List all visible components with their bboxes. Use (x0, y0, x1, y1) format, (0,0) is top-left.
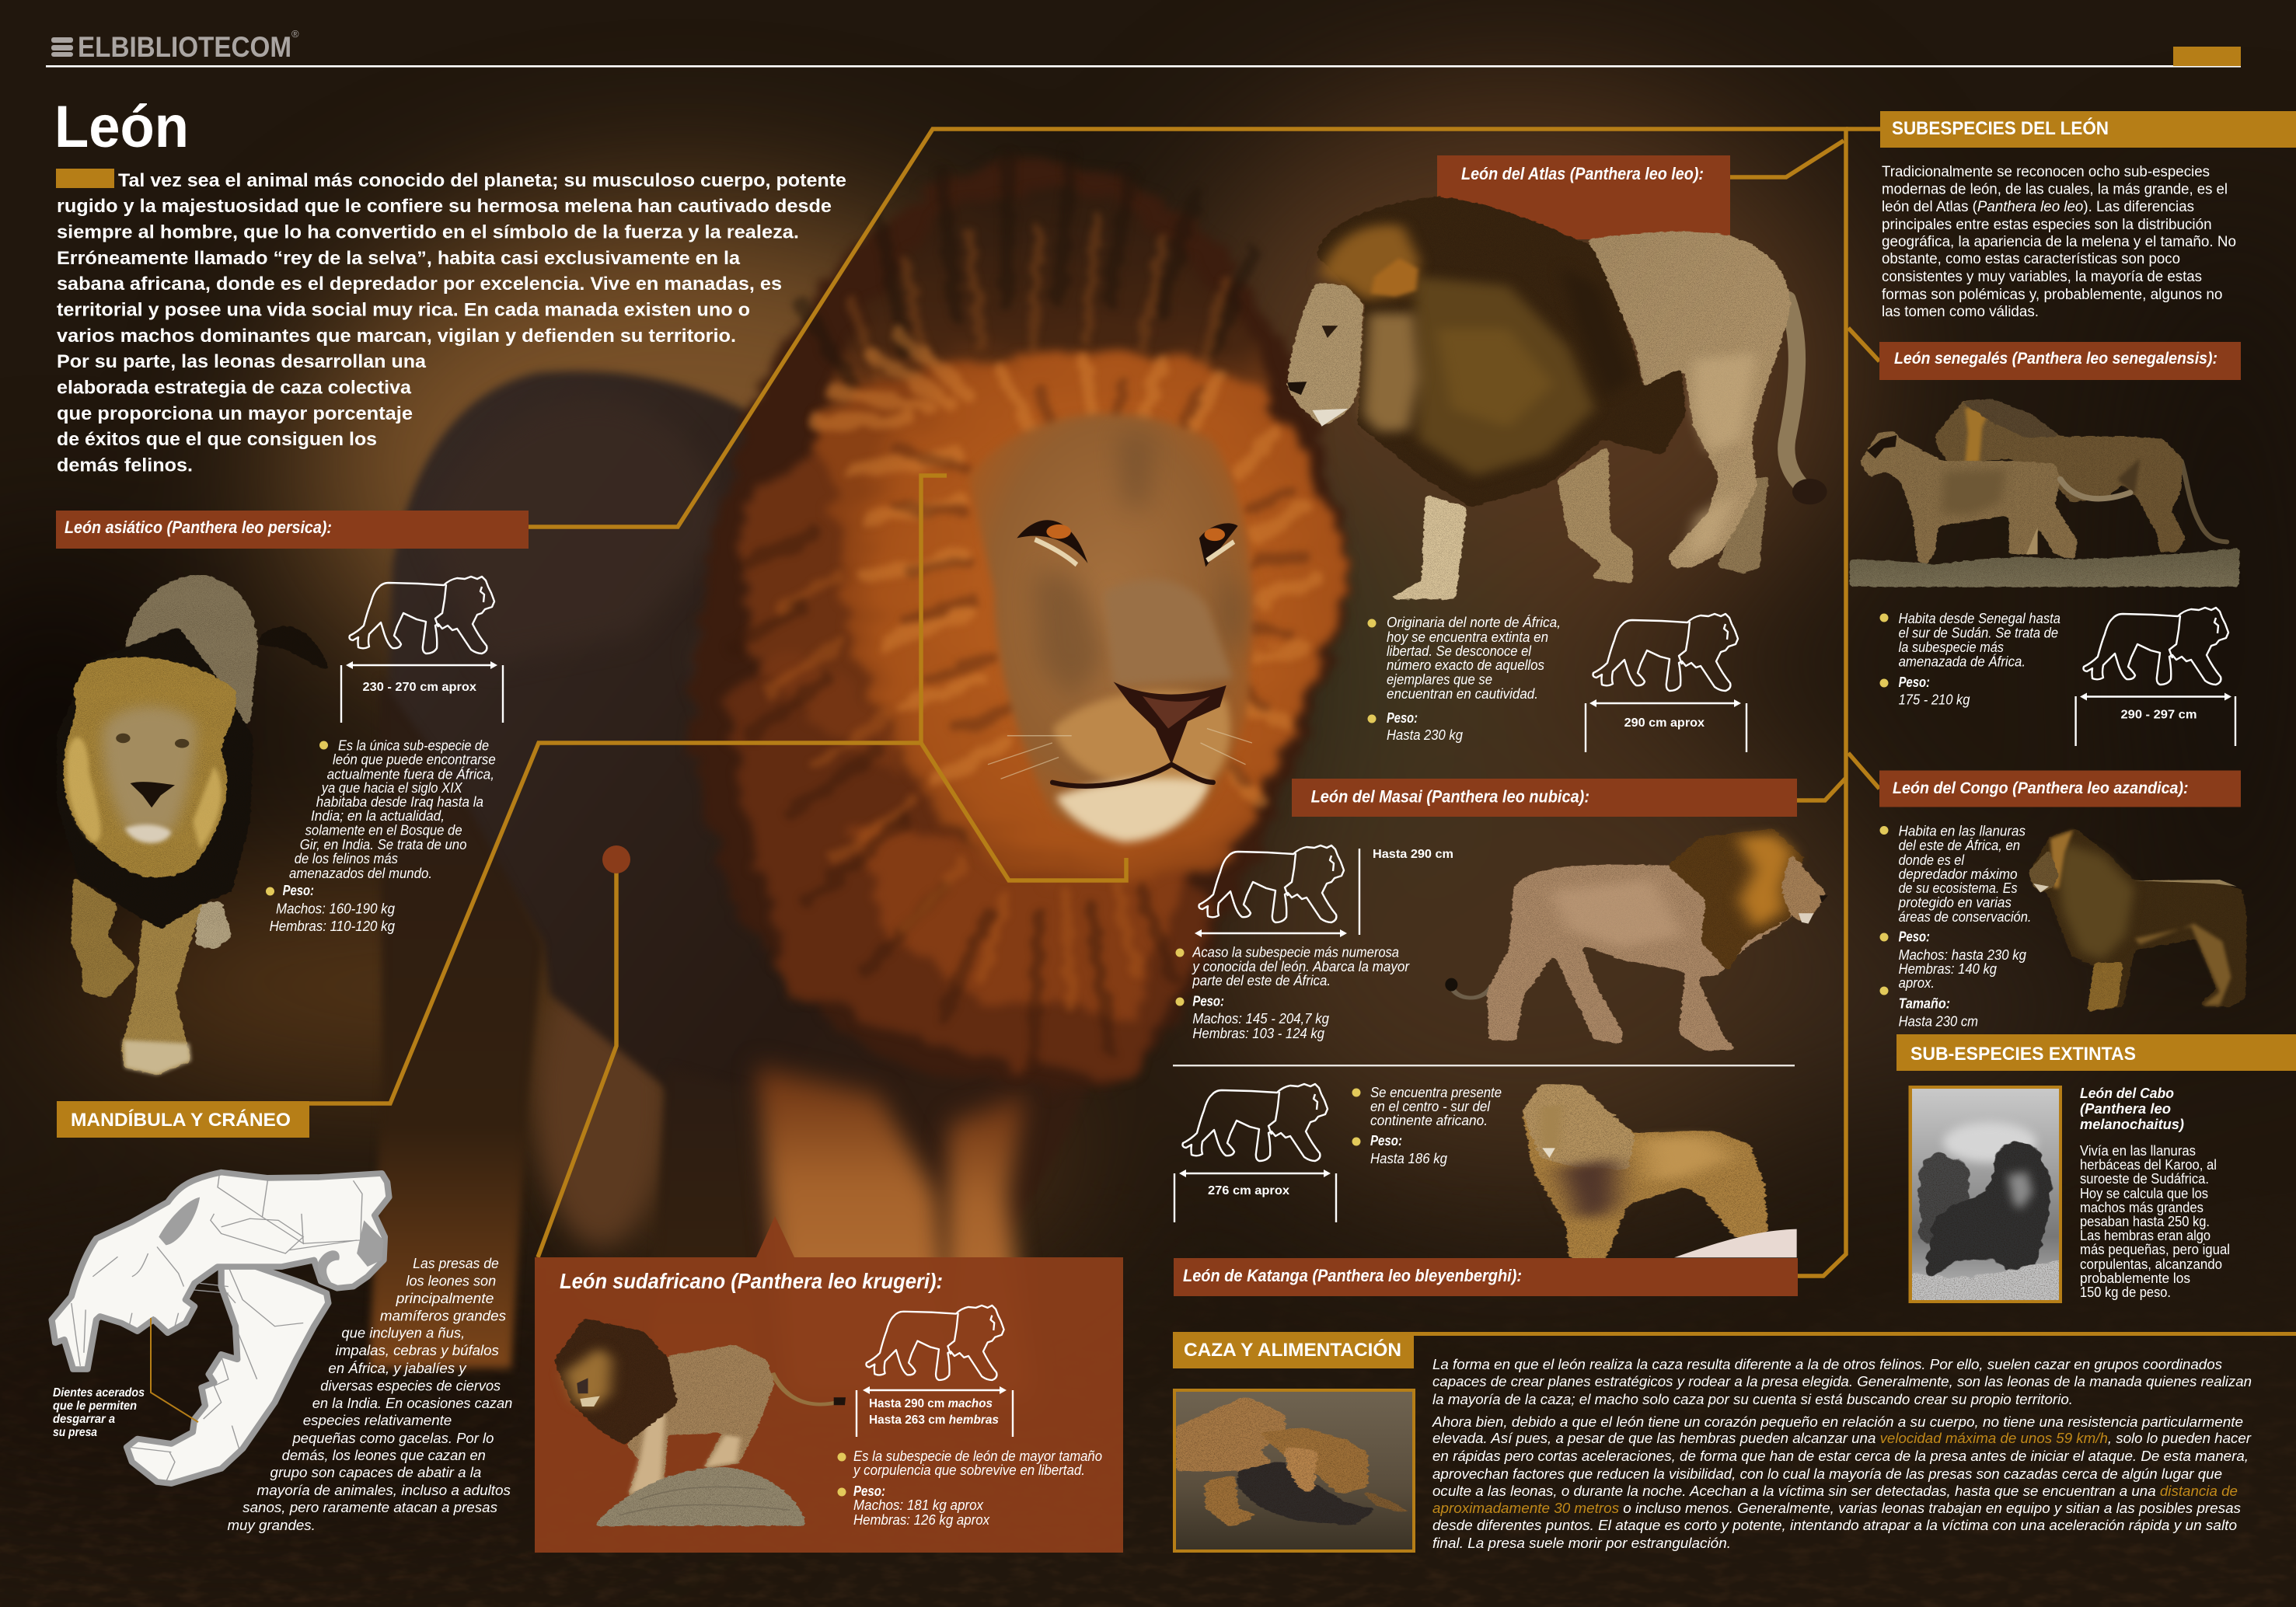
photo: asiatic lion (57, 575, 330, 1075)
text: Atlas facts: encuentran en cautividad. (1387, 686, 1538, 702)
callout: dientes (53, 1318, 198, 1439)
text: caza: La forma en que el león realiza la caza resulta diferente a la de otros felinos. Por ello, suelen cazar en grupos coordinados (1432, 1357, 2222, 1372)
text: presas: mayoría de animales, incluso a adultos (257, 1483, 511, 1499)
bar: Congo (1879, 771, 2241, 807)
orange mane (808, 353, 1349, 882)
text: presas: impalas, cebras y búfalos (336, 1343, 499, 1359)
intro text: Erróneamente llamado “rey de la selva”, habita casi exclusivamente en la (57, 248, 740, 269)
intro text (56, 169, 846, 476)
panel: león del Masai (1175, 779, 1828, 1050)
dimension: asiatic (341, 661, 503, 723)
photo: senegal lions (1850, 399, 2239, 587)
text: presas: grupo son capaces de abatir a la (270, 1465, 481, 1481)
dimension: Atlas: 290 cm aprox (1624, 716, 1705, 730)
intro text: rugido y la majestuosidad que le confiere su hermosa melena han cautivado desde (57, 196, 832, 217)
callout: dientes: su presa (53, 1426, 97, 1439)
hair strokes: top (801, 154, 1252, 384)
header rule and tab (46, 47, 2241, 68)
text: Masai facts: y conocida del león. Abarca la mayor (1192, 959, 1410, 974)
panel: león del Congo (1879, 771, 2247, 1030)
text: caza (1432, 1357, 2252, 1551)
text: asiatic facts: Gir, en India. Se trata de uno (300, 837, 466, 852)
text: Congo facts: Hasta 230 cm (1899, 1014, 1978, 1030)
text: cape lion: Hoy se calcula que los (2080, 1186, 2208, 1201)
text: cape lion: Vivía en las llanuras (2080, 1143, 2196, 1159)
intro text: elaborada estrategia de caza colectiva (57, 378, 411, 398)
text: krugeri facts (838, 1448, 1102, 1528)
text: presas: mamíferos grandes (380, 1308, 506, 1324)
callout: dientes: que le permiten (53, 1400, 137, 1413)
text: asiatic facts: India; en la actualidad, (311, 808, 445, 824)
text: cape lion: corpulentas, alcanzando (2080, 1257, 2222, 1272)
bar: león asiático (56, 511, 529, 549)
text: presas (227, 1256, 512, 1534)
callout: dientes: Dientes acerados (53, 1386, 145, 1400)
text: caza: elevada. Así pues, a pesar de que las hembras pueden alcanzar una velocidad máxima de unos 59 km/h , solo lo pueden hacer (1432, 1431, 2252, 1446)
text: presas: pequeñas como gacelas. Por lo (292, 1431, 494, 1447)
text: asiatic facts: ya que hacia el siglo XIX (320, 780, 463, 796)
photo: Masai lion (1445, 828, 1828, 1050)
text: krugeri facts: Peso: (853, 1483, 885, 1499)
skull illustration (52, 1173, 389, 1483)
text: presas: diversas especies de ciervos (320, 1378, 501, 1394)
heading: caza (1173, 1332, 2296, 1368)
text: Congo facts: aprox. (1899, 975, 1935, 991)
divider (1173, 1065, 1795, 1066)
dimension: krugeri (857, 1386, 1013, 1437)
bar: león asiático: León asiático (Panthera leo persica): (65, 518, 332, 537)
text: Masai facts: parte del este de África. (1192, 973, 1331, 988)
text: Katanga facts: en el centro - sur del (1370, 1099, 1491, 1114)
logo: ELBIBLIOTECOM (78, 31, 291, 63)
bar: Masai: León del Masai (Panthera leo nubica): (1311, 786, 1589, 807)
text: krugeri facts: Machos: 181 kg aprox (853, 1497, 984, 1513)
photo: Atlas lion (1287, 197, 1827, 599)
photo: lionesses hunting (1173, 1389, 1415, 1553)
intro text: sabana africana, donde es el depredador por excelencia. Vive en manadas, es (57, 274, 782, 295)
text: subespecies: geográfica, la apariencia de la melena y el tamaño. No (1882, 234, 2236, 250)
muzzle (1052, 691, 1230, 800)
text: presas: demás, los leones que cazan en (282, 1448, 486, 1464)
text: Congo facts: Habita en las llanuras (1899, 824, 2026, 839)
panel: león asiático (56, 511, 529, 1075)
text: asiatic facts: amenazados del mundo. (289, 866, 432, 881)
text: asiatic facts (266, 738, 496, 934)
text: Masai facts (1175, 945, 1410, 1041)
text: asiatic facts: Machos: 160-190 kg (276, 901, 395, 917)
heading: caza: CAZA Y ALIMENTACIÓN (1184, 1339, 1401, 1361)
nose and mouth (1114, 681, 1227, 765)
main central lion photo (369, 154, 1349, 1396)
intro text: demás felinos. (57, 455, 193, 476)
intro text: territorial y posee una vida social muy rica. En cada manada existen uno o (57, 300, 750, 320)
text: asiatic facts: de los felinos más (295, 851, 398, 866)
bar: senegalés: León senegalés (Panthera leo senegalensis): (1894, 350, 2217, 368)
bar: Katanga (1174, 1258, 1798, 1296)
title: León (54, 94, 189, 160)
text: asiatic facts: actualmente fuera de África, (327, 766, 494, 782)
text: presas: que incluyen a ñus, (341, 1325, 465, 1341)
logo: ® (291, 28, 299, 40)
text: Katanga facts: Se encuentra presente (1370, 1085, 1502, 1100)
text: Masai facts: Acaso la subespecie más numerosa (1192, 945, 1399, 960)
size silhouette: krugeri (866, 1305, 1004, 1380)
text: presas: especies relativamente (303, 1413, 452, 1429)
panel: león de Katanga (1174, 1084, 1798, 1296)
text: asiatic facts: león que puede encontrarse (333, 752, 496, 768)
panel: león senegalés (1850, 342, 2241, 746)
dimension: krugeri: Hasta 263 cm hembras (869, 1414, 999, 1427)
panel: mandíbula y cráneo (52, 1101, 512, 1534)
text: senegal facts: la subespecie más (1899, 640, 2004, 655)
text: Congo facts: Machos: hasta 230 kg (1899, 947, 2026, 963)
dimension: asiatic: 230 - 270 cm aprox (362, 681, 476, 694)
text: cape lion: Las hembras eran algo (2080, 1228, 2211, 1243)
text: Atlas facts: Originaria del norte de África, (1387, 615, 1561, 630)
text: cape lion: 150 kg de peso. (2080, 1285, 2171, 1300)
bar: Katanga: León de Katanga (Panthera leo bleyenberghi): (1183, 1266, 1522, 1285)
text: caza: final. La presa suele morir por estrangulación. (1432, 1536, 1731, 1551)
hair strokes: orange mane (730, 333, 1317, 1059)
text: caza: aproximadamente 30 metros o incluso menos. Generalmente, varias leonas trabajan en equipo y sitian a las posibles presas (1432, 1501, 2241, 1516)
text: Masai facts: Machos: 145 - 204,7 kg (1192, 1011, 1329, 1027)
callout: dientes: desgarrar a (53, 1413, 115, 1426)
panel: subespecies del león (1880, 111, 2296, 320)
photo: Congo lion (2029, 828, 2247, 1012)
text: Congo facts: depredador máximo (1899, 866, 2018, 882)
text: subespecies: Tradicionalmente se reconocen ocho sub-especies (1882, 164, 2210, 180)
size silhouette: senegal (2083, 608, 2228, 685)
dimension: Masai: Hasta 290 cm (1373, 848, 1453, 861)
text: subespecies: las tomen como válidas. (1882, 304, 2039, 320)
text: Congo facts: de su ecosistema. Es (1899, 880, 2018, 896)
intro text: Tal vez sea el animal más conocido del planeta; su musculoso cuerpo, potente (118, 170, 846, 191)
front legs (756, 1066, 956, 1396)
text: Katanga facts: Hasta 186 kg (1370, 1151, 1447, 1166)
text: Atlas facts: número exacto de aquellos (1387, 657, 1544, 673)
text: asiatic facts: Hembras: 110-120 kg (270, 919, 395, 934)
text: presas: muy grandes. (227, 1518, 316, 1534)
text: Katanga facts: Peso: (1370, 1133, 1402, 1149)
text: subespecies: consistentes y muy variables, la mayoría de estas (1882, 269, 2202, 285)
text: asiatic facts: Es la única sub-especie de (338, 738, 489, 754)
text: senegal facts: el sur de Sudán. Se trata de (1899, 625, 2058, 640)
text: cape lion: más pequeñas, pero igual (2080, 1242, 2230, 1257)
bar: Atlas (1437, 155, 1730, 239)
dimension: senegal: 290 - 297 cm (2120, 709, 2197, 722)
text: Congo facts: Hembras: 140 kg (1899, 961, 1997, 977)
text: presas: sanos, pero raramente atacan a presas (243, 1500, 497, 1516)
text: Masai facts: Hembras: 103 - 124 kg (1192, 1026, 1324, 1041)
photo: krugeri lion on rock (554, 1319, 846, 1525)
text: Congo facts: Peso: (1899, 929, 1930, 945)
text: Masai facts: Peso: (1192, 994, 1224, 1009)
text: caza: en rápidas pero cortas aceleraciones, de forma que han de estar cerca de la presa antes de iniciar el ataque. De esta manera, (1432, 1448, 2249, 1464)
text: caza: Ahora bien, debido a que el león tiene un corazón pequeño en relación a su cuerpo, no tiene una resistencia particularmente (1432, 1414, 2243, 1430)
text: krugeri facts: Es la subespecie de león de mayor tamaño (853, 1448, 1102, 1464)
dimension: Katanga (1174, 1170, 1336, 1222)
panel: sub-especies extintas (1896, 1034, 2296, 1313)
bar: senegalés (1879, 342, 2241, 380)
text: Atlas facts: Hasta 230 kg (1387, 727, 1463, 743)
intro text: Por su parte, las leonas desarrollan una (57, 351, 426, 372)
text: cape lion: pesaban hasta 250 kg. (2080, 1214, 2210, 1229)
text: caza: la mayoría de la caza; el macho solo caza por su cuenta si está buscando crear su propio territorio. (1432, 1392, 2073, 1407)
text: senegal facts (1879, 611, 2060, 708)
text: cape lion: probablemente los (2080, 1271, 2190, 1286)
bar: Atlas: León del Atlas (Panthera leo leo): (1461, 164, 1704, 183)
text: presas: principalmente (396, 1291, 494, 1307)
text: cape lion: (Panthera leo (2080, 1101, 2171, 1117)
heading: subespecies (1880, 111, 2296, 148)
text: Katanga facts (1352, 1085, 1502, 1166)
text: cape lion: melanochaitus) (2080, 1117, 2184, 1132)
text: Congo facts: del este de África, en (1899, 838, 2020, 853)
text: asiatic facts: Peso: (283, 883, 314, 898)
text: asiatic facts: solamente en el Bosque de (305, 822, 462, 838)
text: subespecies: modernas de león, de las cuales, la más grande, es el (1882, 182, 2228, 197)
text: senegal facts: amenazada de África. (1899, 654, 2026, 670)
face (968, 414, 1251, 835)
text: senegal facts: Peso: (1899, 675, 1930, 690)
heading: mandíbula: MANDÍBULA Y CRÁNEO (71, 1109, 291, 1131)
connector lines (309, 129, 1880, 1276)
text: caza: capaces de crear planes estratégicos y rodear a la presa elegida. Generalmente, son las leonas de la manada quienes realizan (1432, 1374, 2252, 1389)
text: subespecies (1882, 164, 2236, 320)
text: subespecies: principales entre estas especies son la distribución (1882, 217, 2212, 233)
photo: cape lion engraving (1909, 1086, 2062, 1303)
size silhouette: asiatic (350, 577, 494, 654)
heading: sudafricano: León sudafricano (Panthera leo krugeri): (560, 1269, 943, 1293)
size silhouette: Katanga (1183, 1084, 1328, 1161)
text: Congo facts (1879, 824, 2032, 1030)
dark mane halo (692, 162, 1349, 1090)
text: Atlas facts (1368, 615, 1561, 743)
text: asiatic facts: habitaba desde Iraq hasta la (316, 794, 483, 810)
text: presas: Las presas de (413, 1256, 499, 1272)
panel: león del Atlas (1287, 155, 1827, 752)
text: Congo facts: protegido en varias (1898, 895, 2012, 911)
dimension: Katanga: 276 cm aprox (1208, 1184, 1289, 1197)
photo: Katanga lion (1523, 1084, 1797, 1259)
text: caza: desde diferentes puntos. El ataque es corto y potente, intentando atrapar a la víctima con una aceleración rápida y un salto (1432, 1518, 2237, 1533)
text: subespecies: león del Atlas (Panthera leo leo). Las diferencias (1882, 199, 2194, 215)
text: cape lion (2080, 1086, 2230, 1300)
text: senegal facts: 175 - 210 kg (1899, 692, 1970, 708)
text: Congo facts: Tamaño: (1899, 996, 1950, 1012)
heading: mandíbula (57, 1101, 309, 1138)
text: senegal facts: Habita desde Senegal hasta (1899, 611, 2060, 626)
text: Congo facts: donde es el (1899, 852, 1965, 868)
heading: extintas: SUB-ESPECIES EXTINTAS (1910, 1044, 2136, 1065)
intro text: varios machos dominantes que marcan, vigilan y defienden su territorio. (57, 326, 736, 347)
upper mane (808, 191, 1268, 462)
dimension: krugeri: Hasta 290 cm machos (869, 1397, 993, 1410)
eyes (1017, 520, 1238, 566)
text: Katanga facts: continente africano. (1370, 1113, 1488, 1128)
text: presas: los leones son (406, 1273, 496, 1289)
text: cape lion: suroeste de Sudáfrica. (2080, 1171, 2209, 1187)
intro text: siempre al hombre, que lo ha convertido en el símbolo de la fuerza y la realeza. (57, 222, 799, 242)
bar: Masai (1292, 779, 1797, 817)
text: Atlas facts: Peso: (1387, 710, 1418, 726)
size silhouette: Atlas (1593, 614, 1738, 691)
dimension: Atlas (1586, 699, 1746, 752)
text: presas: en la India. En ocasiones cazan (312, 1396, 512, 1412)
size silhouette: Masai (1199, 845, 1344, 922)
text: Atlas facts: ejemplares que se (1387, 671, 1492, 687)
text: caza: oculte a las leonas, o durante la noche. Acechan a la víctima sin ser detectadas, hasta que se encuentran a una distancia de (1432, 1483, 2238, 1499)
text: Atlas facts: libertad. Se desconoce el (1387, 643, 1532, 659)
heading: extintas (1896, 1034, 2296, 1071)
text: Atlas facts: hoy se encuentra extinta en (1387, 629, 1548, 645)
text: cape lion: León del Cabo (2080, 1086, 2174, 1101)
dimension: senegal (2076, 693, 2235, 746)
marker dot (602, 845, 630, 873)
text: cape lion: herbáceas del Karoo, al (2080, 1157, 2217, 1173)
text: cape lion: machos más grandes (2080, 1200, 2204, 1215)
text: caza: aprovechan factores que reducen la visibilidad, con lo cual la mayoría de las presas son cazadas cerca de algún lugar que (1432, 1466, 2222, 1482)
text: subespecies: obstante, como estas características son poco (1882, 251, 2180, 267)
intro text: que proporciona un mayor porcentaje (57, 403, 413, 424)
dimension: Masai (1195, 848, 1453, 937)
text: Congo facts: áreas de conservación. (1899, 909, 2032, 925)
text: krugeri facts: y corpulencia que sobrevive en libertad. (852, 1462, 1085, 1478)
bar: Congo: León del Congo (Panthera leo azandica): (1893, 779, 2189, 797)
text: krugeri facts: Hembras: 126 kg aprox (853, 1512, 990, 1528)
heading: subespecies: SUBESPECIES DEL LEÓN (1892, 117, 2109, 139)
text: presas: en África, y jabalíes y (328, 1360, 467, 1377)
panel: caza y alimentación (1173, 1332, 2296, 1553)
panel background (535, 1216, 1123, 1553)
panel: león sudafricano (535, 1216, 1123, 1553)
text: subespecies: formas son polémicas y, probablemente, algunos no (1882, 287, 2223, 303)
intro text: de éxitos que el que consiguen los (57, 429, 377, 450)
